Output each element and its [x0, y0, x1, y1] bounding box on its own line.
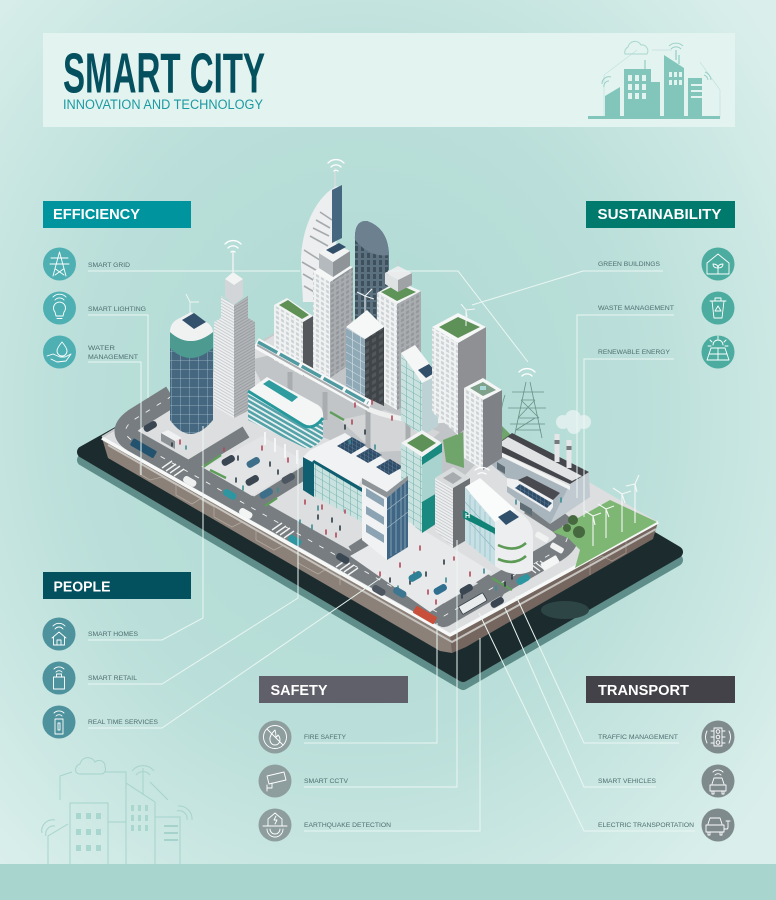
vehicles — [130, 420, 565, 624]
chimneys — [557, 434, 569, 468]
icon: renewable energy — [702, 336, 734, 368]
icon: spire wifi — [328, 160, 344, 171]
building: tall white tower with green terrace — [377, 260, 421, 410]
label: water management second line: MANAGEMENT — [88, 354, 138, 361]
icon: traffic management — [702, 720, 734, 754]
building: grey tower with teal roof — [464, 378, 502, 470]
icon: smart vehicles — [702, 764, 734, 798]
icon: tower wifi — [225, 241, 241, 252]
building: teal wide office — [248, 377, 323, 464]
panel: people — [42, 572, 191, 738]
factory — [492, 410, 591, 524]
panel: safety — [258, 676, 408, 842]
building: balcony tower — [362, 476, 408, 560]
label: earthquake detection: EARTHQUAKE DETECTION — [304, 822, 391, 829]
icon: hospital wifi — [475, 467, 489, 474]
heading: efficiency: EFFICIENCY — [53, 207, 140, 223]
heading: safety — [259, 676, 408, 703]
header city icon — [588, 41, 720, 119]
heading: people: PEOPLE — [54, 580, 111, 596]
wind turbine — [357, 289, 374, 312]
footer band — [0, 864, 776, 900]
label: water management: WATER — [88, 345, 115, 352]
label: fire safety: FIRE SAFETY — [304, 734, 346, 741]
ambulance — [540, 555, 560, 571]
icon: smart lighting — [43, 292, 76, 324]
panel: sustainability — [586, 201, 735, 368]
icon: waste management — [702, 292, 734, 324]
icon: smart homes — [42, 618, 76, 650]
building: slanted glass tower — [401, 345, 438, 436]
bus stop shelter — [161, 430, 182, 449]
field with turbines and trees — [553, 475, 657, 568]
building: teal glass tower — [401, 430, 442, 533]
subtitle: INNOVATION AND TECHNOLOGY — [63, 97, 263, 112]
heading: transport — [586, 676, 735, 703]
icon: green buildings — [702, 248, 734, 280]
heading: safety: SAFETY — [270, 683, 328, 699]
label: smart cctv: SMART CCTV — [304, 778, 348, 785]
icon: smart retail — [42, 662, 76, 694]
icon: real time services — [42, 706, 76, 738]
footer ghost city icon — [42, 758, 192, 864]
title: SMART CITY — [63, 42, 265, 106]
label: smart grid: SMART GRID — [88, 262, 130, 269]
label: smart retail: SMART RETAIL — [88, 675, 137, 682]
icon: water management — [43, 336, 76, 368]
heading: people — [43, 572, 191, 599]
label: green buildings: GREEN BUILDINGS — [598, 261, 660, 268]
heading: sustainability — [586, 201, 735, 228]
building: dark oval tower — [355, 221, 389, 325]
building: white stepped tower — [214, 241, 255, 418]
label: waste management: WASTE MANAGEMENT — [598, 305, 674, 312]
icon: electric transportation — [702, 808, 734, 842]
elevated train — [256, 342, 464, 450]
icon: smart grid — [43, 248, 76, 280]
crosswalks — [162, 461, 548, 575]
header panel — [43, 33, 735, 127]
city platform — [102, 317, 658, 653]
power pylon — [501, 369, 546, 438]
panel: transport — [586, 676, 735, 842]
building: green roof block — [274, 298, 313, 376]
green courtyard — [443, 432, 464, 468]
building: blue glass round tower — [170, 294, 213, 434]
label: real time services: REAL TIME SERVICES — [88, 719, 158, 726]
smartphone base — [83, 330, 677, 684]
label: electric transportation: ELECTRIC TRANSPORTATION — [598, 822, 694, 829]
heading: transport: TRANSPORT — [598, 683, 689, 699]
people — [172, 400, 561, 604]
label: smart lighting: SMART LIGHTING — [88, 306, 146, 313]
connector lines — [88, 271, 695, 831]
smoke — [556, 410, 591, 434]
building: grey striped tower — [435, 467, 470, 548]
fire truck — [413, 606, 437, 624]
icon: pylon wifi — [519, 369, 535, 376]
icon: smart cctv — [258, 764, 292, 798]
building: retail block with solar roof — [303, 433, 408, 522]
building: curved spire tower — [301, 160, 353, 378]
label: traffic management: TRAFFIC MANAGEMENT — [598, 734, 678, 741]
label: renewable energy: RENEWABLE ENERGY — [598, 349, 670, 356]
building: large white with green roof — [432, 304, 486, 435]
trees — [563, 515, 585, 538]
roads — [126, 396, 568, 616]
building: hospital — [463, 467, 533, 574]
green patch behind factory — [487, 426, 512, 446]
panel: efficiency — [43, 201, 191, 368]
wind turbines — [585, 475, 639, 546]
building: glass and dark tower — [346, 289, 384, 406]
icon: fire safety — [258, 720, 292, 754]
heading: efficiency — [43, 201, 191, 228]
label: smart homes: SMART HOMES — [88, 631, 138, 638]
heading: sustainability: SUSTAINABILITY — [598, 207, 722, 223]
icon: earthquake detection — [258, 808, 292, 842]
shaded ground between towers — [250, 340, 500, 500]
label: smart vehicles: SMART VEHICLES — [598, 778, 656, 785]
white electric bus — [458, 593, 487, 614]
parking plazas — [204, 436, 306, 496]
hospital sign: H — [465, 513, 470, 520]
hedges — [203, 412, 512, 590]
